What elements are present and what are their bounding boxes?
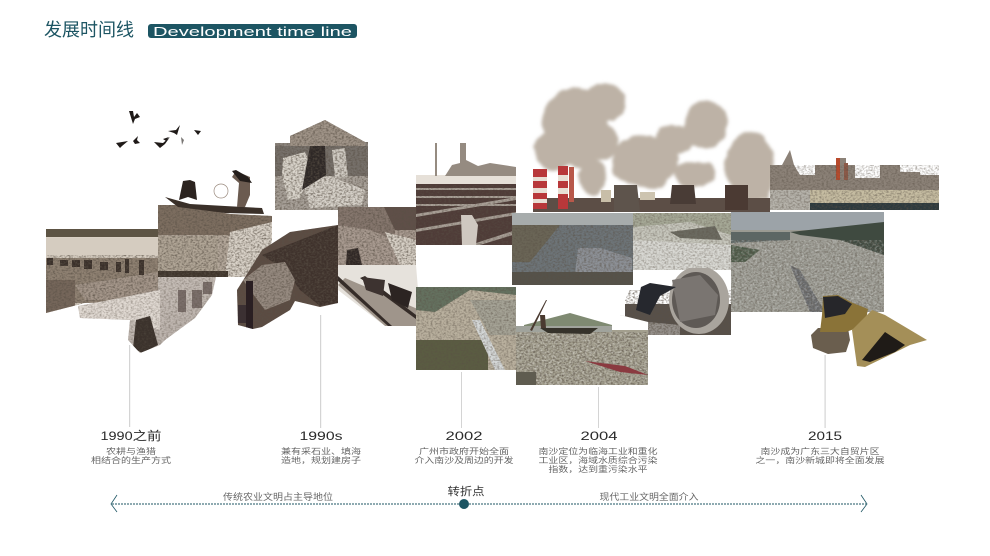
- photo: mine rail carts: [338, 265, 422, 327]
- milestone 2015: 南沙成为广东三大自贸片区: [760, 446, 880, 456]
- milestone 1990之前: 农耕与渔猎: [106, 446, 156, 456]
- photo: brick drying rows: [416, 175, 516, 245]
- photo: aerial construction site: [416, 287, 516, 370]
- photo: oil refinery: [770, 150, 939, 210]
- photo: rice field harvest: [46, 229, 158, 313]
- milestone 2015: 之一，南沙新城即将全面发展: [756, 455, 884, 465]
- photo: faded workers in field: [78, 277, 218, 355]
- photo: pipes discharging foam: [633, 213, 731, 270]
- person beside pipe: [636, 283, 676, 315]
- bottom axis arrow: [111, 495, 867, 512]
- title badge: Development time line: Development time line: [153, 24, 352, 39]
- milestone 1990之前: 1990之前: [100, 428, 162, 443]
- turning point label: 转折点: [448, 484, 484, 498]
- milestone 1990之前: 相结合的生产方式: [91, 455, 171, 465]
- milestone 2002: 介入南沙及周边的开发: [414, 455, 514, 465]
- photo: sewage pipe with person: [625, 266, 731, 335]
- milestone 2004: 2004: [580, 429, 618, 443]
- milestone 2002: 广州市政府开始全面: [419, 446, 509, 456]
- chimney and factory behind brick rows: [435, 143, 516, 176]
- right era label: 现代工业文明全面介入: [600, 491, 698, 502]
- plant base: [533, 166, 770, 212]
- photo: workers breaking stones: [275, 120, 368, 210]
- boat and fishermen: [165, 170, 264, 214]
- photo: aerial view of factory town: [512, 213, 633, 285]
- title: 发展时间线: [44, 20, 134, 40]
- milestone 2004: [538, 429, 658, 474]
- fisherman poling boat: [530, 300, 547, 331]
- photo: fishing boat: [158, 170, 272, 277]
- milestone 1990s: 造地，规划建房子: [281, 455, 361, 465]
- milestone 1990s: 1990s: [300, 429, 342, 443]
- smoke clouds: [534, 85, 774, 200]
- milestone 1990s: 兼有采石业、填海: [281, 446, 361, 456]
- title badge: Development time line: [148, 24, 357, 39]
- photo: quarry slope: [237, 225, 338, 330]
- milestone 2004: 指数，达到重污染水平: [548, 464, 648, 474]
- milestone 2004: 南沙定位为临海工业和重化: [538, 446, 658, 456]
- milestone 2004: 工业区，海域水质综合污染: [538, 455, 658, 465]
- connector lines: [129, 315, 826, 428]
- photo: dead fish on water with boat: [516, 313, 648, 385]
- photo: power plant with smoke: [533, 85, 774, 212]
- milestone 2015: 2015: [808, 429, 842, 443]
- photo: crowd of labourers: [338, 207, 416, 265]
- milestone 1990之前: [91, 428, 171, 465]
- milestone 2002: 2002: [446, 429, 483, 443]
- milestone 2002: [414, 429, 514, 465]
- left era label: 传统农业文明占主导地位: [223, 491, 333, 502]
- photo: new city aerial: [731, 212, 884, 312]
- icon: flock of birds: [116, 111, 201, 148]
- icon: bulldozer: [811, 295, 927, 367]
- milestone 1990s: [281, 429, 361, 465]
- milestone 2015: [756, 429, 884, 465]
